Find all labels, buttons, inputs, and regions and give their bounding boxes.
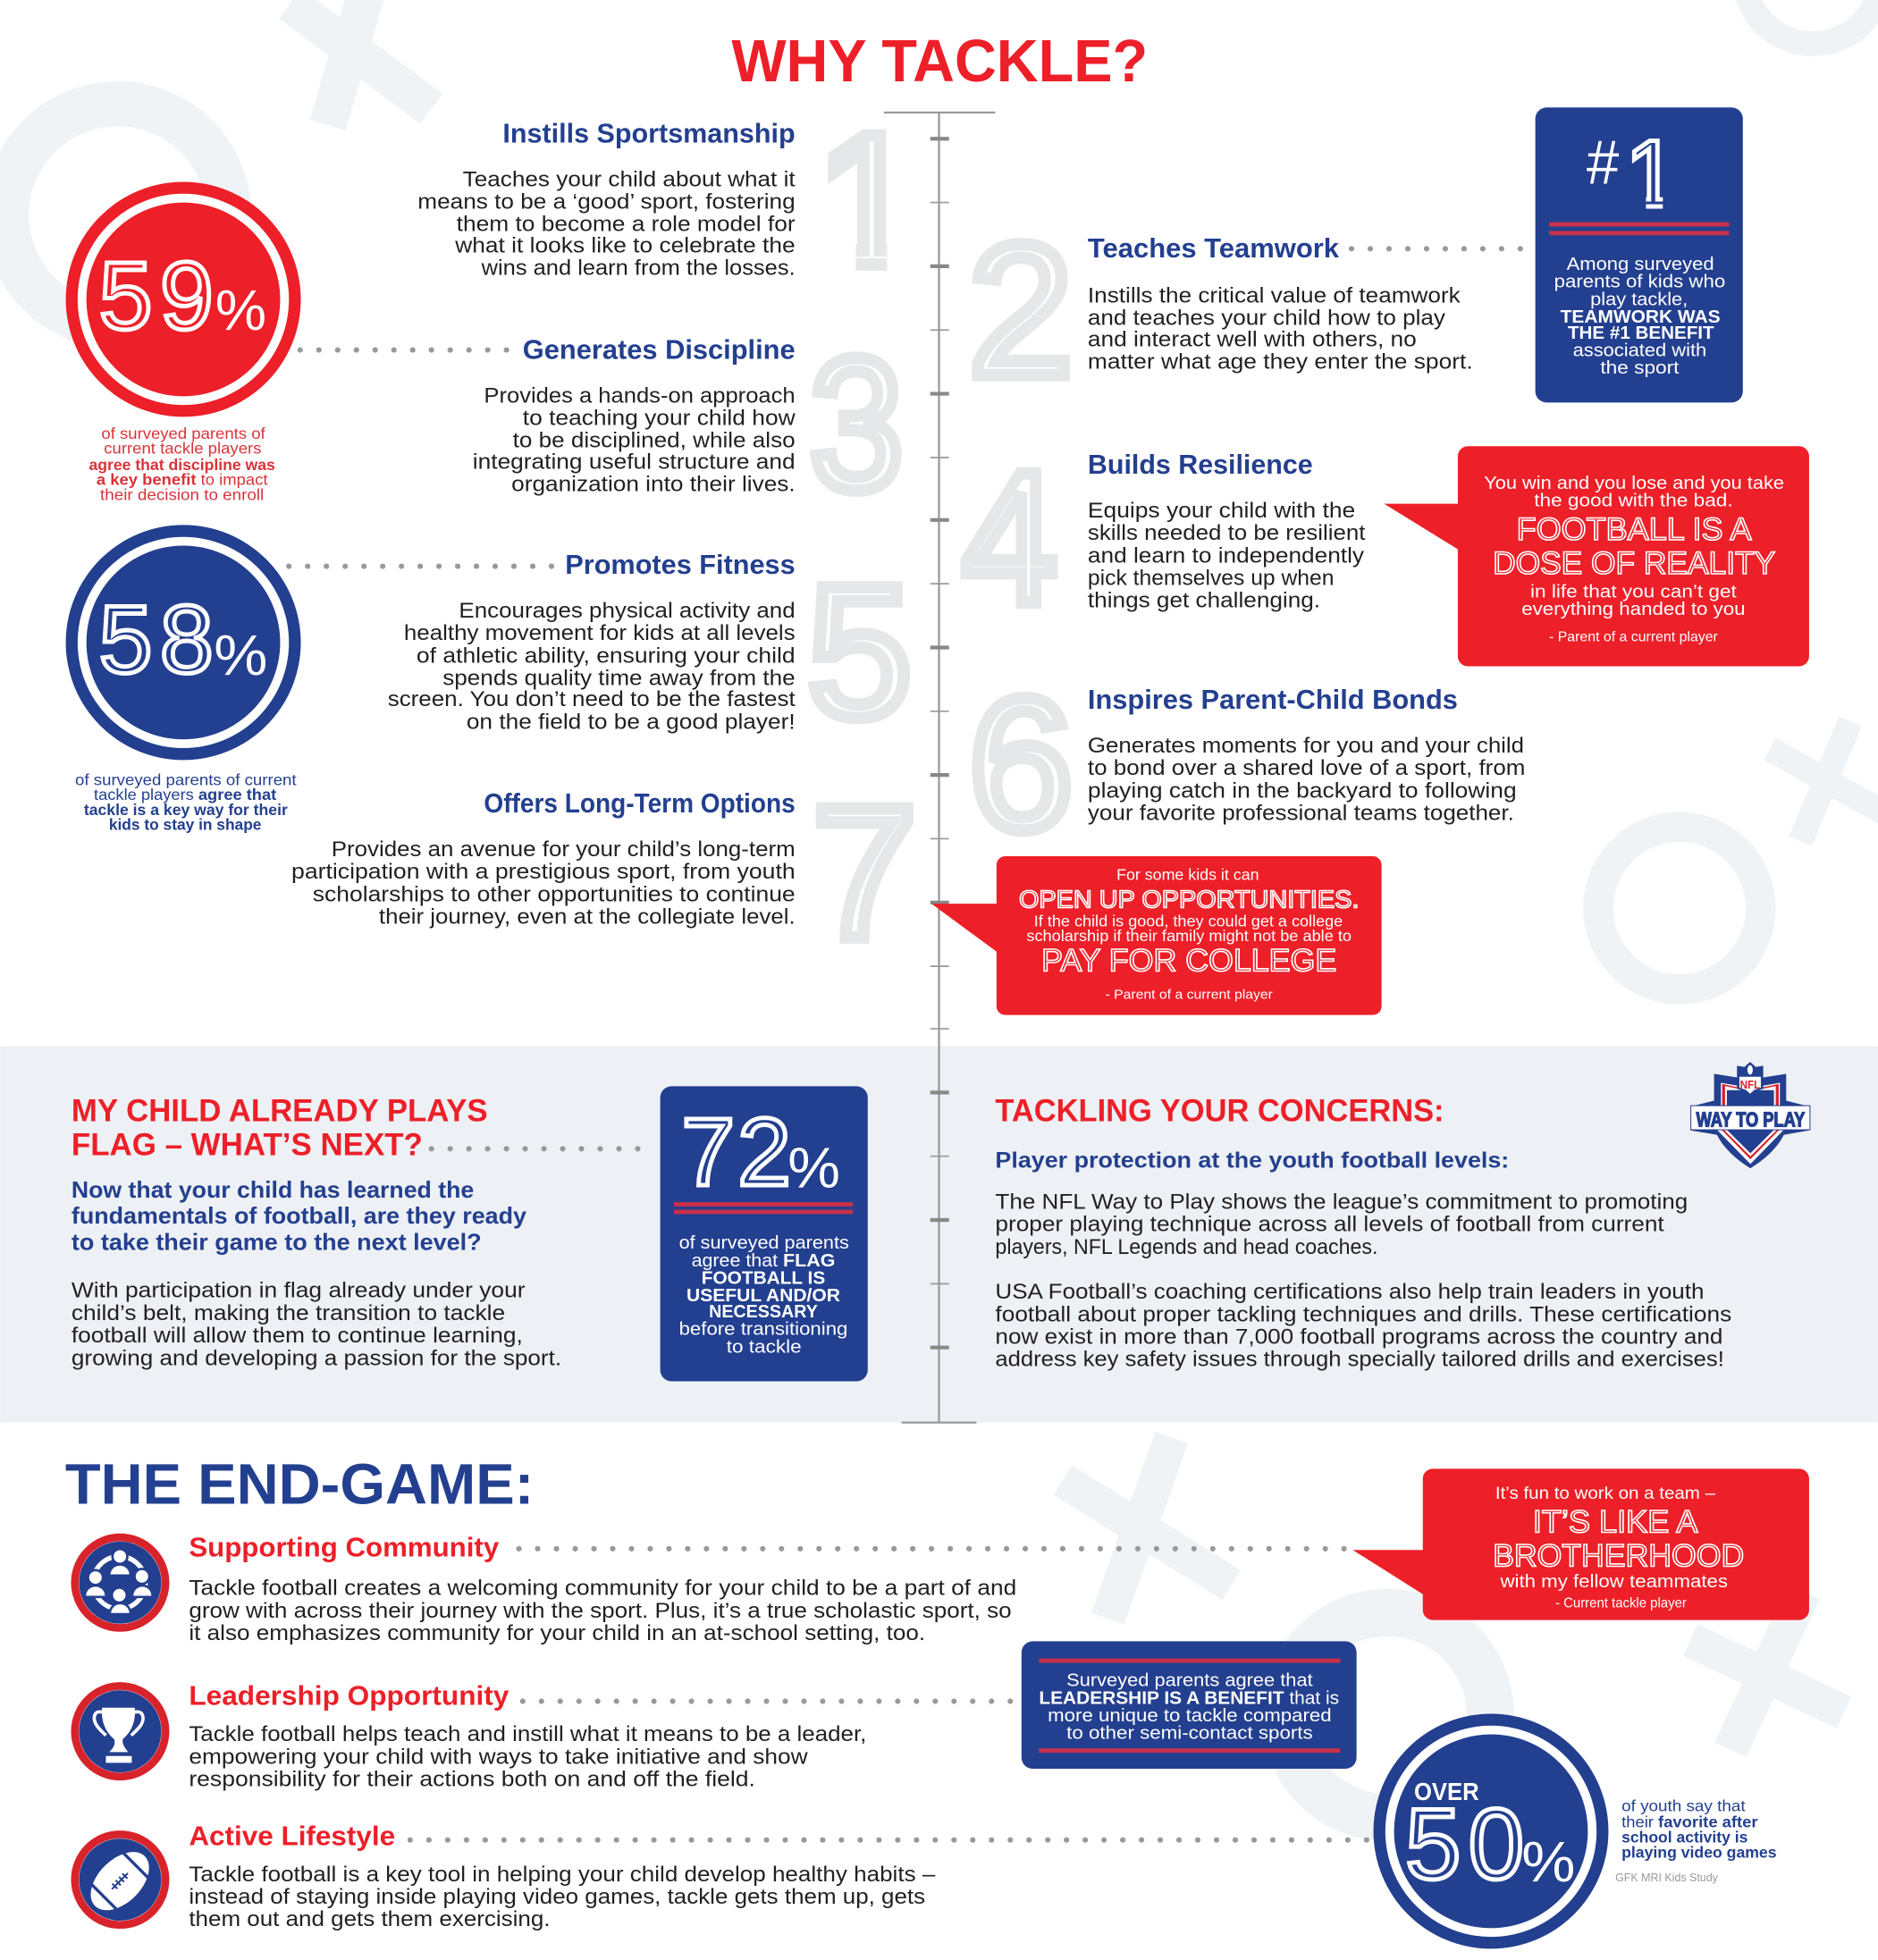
callout: open up opportunities quote: PAY FOR COLLEGE: [1041, 944, 1336, 979]
body text: proper playing technique across all levels of football from current: [995, 1213, 1664, 1237]
dotted connector: [1352, 247, 1523, 251]
dotted connector: [519, 1547, 1346, 1551]
body text: healthy movement for kids at all levels: [404, 621, 796, 645]
logo: NFL Way to Play shield: NFL: [1740, 1079, 1760, 1091]
number 5: 5: [807, 547, 912, 756]
heading: Builds Resilience: [1088, 449, 1313, 480]
panel: tackling your concerns: [995, 1094, 1731, 1372]
callout: brotherhood quote: BROTHERHOOD: [1493, 1538, 1744, 1573]
body text: skills needed to be resilient: [1088, 521, 1366, 545]
panel: active lifestyle: [75, 1820, 1368, 1931]
number 6: 6: [969, 660, 1073, 869]
body text: [1088, 734, 1525, 825]
callout: brotherhood quote: It’s fun to work on a team –: [1495, 1484, 1715, 1503]
body text: Tackle football helps teach and instill what it means to be a leader,: [189, 1722, 866, 1746]
callout: 72 percent: 72: [681, 1098, 794, 1206]
icon: community: [75, 1537, 165, 1628]
stat: 59 percent circle: 59: [99, 242, 221, 349]
callout: 72 percent: %: [787, 1136, 840, 1200]
panel: long-term options: [291, 769, 917, 978]
body text: on the field to be a good player!: [467, 710, 796, 734]
dotted connector: [300, 348, 509, 352]
callout: leadership benefit: more unique to tackle compared: [1048, 1706, 1332, 1726]
body text: grow with across their journey with the sport. Plus, it’s a true scholastic sport, so: [189, 1599, 1012, 1623]
panel: generates discipline: [300, 320, 904, 529]
panel: supporting community: [75, 1531, 1346, 1645]
heading: Active Lifestyle: [189, 1820, 395, 1851]
body text: Generates moments for you and your child: [1088, 734, 1524, 758]
callout: brotherhood quote: [1352, 1468, 1809, 1620]
panel: parent-child bonds: [969, 660, 1525, 869]
dotted connector: [523, 1699, 1013, 1703]
callout: dose of reality quote: - Parent of a current player: [1549, 629, 1718, 644]
callout: dose of reality quote: You win and you lose and you take: [1484, 474, 1784, 493]
body text: pick themselves up when: [1088, 567, 1334, 591]
body text: and learn to independently: [1088, 543, 1365, 568]
body text: spends quality time away from the: [442, 666, 796, 690]
panel: teaches teamwork: [969, 206, 1523, 416]
body text: The NFL Way to Play shows the league’s commitment to promoting: [995, 1190, 1688, 1214]
stat: 58 percent circle: 58: [99, 585, 221, 693]
body text: child’s belt, making the transition to tackle: [72, 1301, 505, 1325]
body text: [473, 383, 796, 497]
section heading: the end-game: THE END-GAME:: [65, 1452, 534, 1517]
body text: to teaching your child how: [523, 407, 796, 431]
caption: 58 percent: of surveyed parents of current: [75, 770, 297, 788]
callout: leadership benefit: to other semi-contact sports: [1066, 1723, 1313, 1743]
body text: and interact well with others, no: [1088, 327, 1417, 351]
number 1: 1: [816, 96, 921, 305]
callout: 72 percent: before transitioning: [679, 1320, 847, 1340]
stat: 59 percent circle: [66, 181, 301, 416]
body text: [995, 1190, 1731, 1372]
subheading: Player protection at the youth football levels:: [995, 1148, 1509, 1173]
body text: them to become a role model for: [457, 213, 796, 237]
body text: [388, 599, 796, 734]
number 3: 3: [810, 320, 904, 529]
caption: over 50 percent: school activity is: [1621, 1829, 1747, 1846]
body text: now exist in more than 7,000 football programs across the country and: [995, 1325, 1722, 1349]
callout: number 1 benefit: [1536, 107, 1743, 402]
number 7: 7: [813, 769, 917, 978]
body text: playing catch in the backyard to following: [1088, 778, 1517, 803]
stat: over 50 percent circle: %: [1521, 1830, 1575, 1894]
body text: growing and developing a passion for the sport.: [72, 1346, 561, 1370]
caption: 59 percent: current tackle players: [104, 440, 262, 458]
callout: open up opportunities quote: - Parent of a current player: [1106, 988, 1273, 1002]
body text: participation with a prestigious sport, from youth: [291, 860, 796, 884]
heading: MY CHILD ALREADY PLAYS: [72, 1094, 488, 1129]
dotted connector: [289, 564, 552, 568]
body text: organization into their lives.: [511, 473, 796, 497]
callout: number 1 benefit: associated with: [1573, 341, 1706, 361]
body text: things get challenging.: [1088, 589, 1320, 613]
subheading: Now that your child has learned the: [72, 1178, 474, 1203]
heading: Promotes Fitness: [565, 549, 796, 580]
timeline: [884, 113, 995, 1423]
subheading: fundamentals of football, are they ready: [72, 1204, 527, 1229]
heading: Inspires Parent-Child Bonds: [1088, 684, 1458, 715]
callout: 72 percent: to tackle: [727, 1337, 802, 1357]
body text: [1088, 499, 1366, 613]
callout: dose of reality quote: the good with the bad.: [1534, 491, 1733, 510]
body text: [291, 837, 796, 930]
body text: address key safety issues through specially tailored drills and exercises!: [995, 1348, 1724, 1372]
body text: Provides a hands-on approach: [484, 383, 796, 408]
body text: means to be a ‘good’ sport, fostering: [417, 190, 796, 215]
heading: Teaches Teamwork: [1088, 232, 1340, 264]
callout: brotherhood quote: - Current tackle player: [1555, 1596, 1687, 1611]
callout: open up opportunities quote: [931, 856, 1382, 1015]
panel: flag to tackle: [72, 1094, 639, 1370]
source note: GFK MRI Kids Study: [1615, 1871, 1718, 1884]
caption: 58 percent: tackle is a key way for their: [84, 801, 288, 819]
body text: [189, 1863, 936, 1931]
body text: Equips your child with the: [1088, 499, 1355, 523]
callout: open up opportunities quote: If the child is good, they could get a college: [1034, 912, 1343, 930]
body text: USA Football’s coaching certifications also help train leaders in youth: [995, 1280, 1704, 1304]
heading: Supporting Community: [189, 1531, 499, 1562]
body text: their journey, even at the collegiate level.: [379, 905, 796, 930]
callout: number 1 benefit: #: [1587, 128, 1619, 198]
caption: 59 percent: [88, 425, 275, 503]
body text: Tackle football is a key tool in helping your child develop healthy habits –: [189, 1863, 936, 1887]
callout: leadership benefit: Surveyed parents agree that: [1066, 1671, 1313, 1691]
callout: 72 percent: agree that FLAG: [692, 1251, 835, 1271]
body text: to be disciplined, while also: [513, 429, 796, 453]
stat: over 50 percent circle: [1374, 1713, 1608, 1948]
body text: Instills the critical value of teamwork: [1088, 283, 1461, 307]
callout: number 1 benefit: parents of kids who: [1554, 273, 1725, 292]
caption: over 50 percent: of youth say that: [1621, 1797, 1746, 1815]
heading: Offers Long-Term Options: [484, 787, 796, 819]
callout: number 1 benefit: the sport: [1600, 358, 1680, 378]
body text: integrating useful structure and: [473, 450, 796, 474]
heading: Instills Sportsmanship: [502, 117, 796, 148]
body text: football will allow them to continue learning,: [72, 1324, 523, 1348]
body text: your favorite professional teams together.: [1088, 801, 1514, 825]
body text: responsibility for their actions both on and off the field.: [189, 1768, 755, 1792]
callout: open up opportunities quote: OPEN UP OPPORTUNITIES.: [1019, 885, 1359, 913]
callout: 72 percent: of surveyed parents: [679, 1233, 849, 1253]
body text: them out and gets them exercising.: [189, 1907, 551, 1931]
callout: number 1 benefit: play tackle,: [1590, 290, 1688, 309]
stat: over 50 percent circle: OVER: [1414, 1778, 1479, 1805]
caption: 58 percent: tackle players agree that: [94, 786, 276, 803]
callout: dose of reality quote: DOSE OF REALITY: [1493, 546, 1775, 581]
body text: what it looks like to celebrate the: [454, 234, 796, 258]
caption: 59 percent: of surveyed parents of: [101, 425, 265, 442]
body text: football about proper tackling techniques and drills. These certifications: [995, 1302, 1731, 1326]
body text: Encourages physical activity and: [459, 599, 796, 623]
logo: NFL Way to Play shield: WAY TO PLAY: [1697, 1107, 1805, 1131]
number 2: 2: [969, 206, 1073, 416]
callout: dose of reality quote: [1384, 446, 1809, 666]
caption: 59 percent: a key benefit to impact: [97, 471, 268, 489]
callout: dose of reality quote: in life that you can’t get: [1530, 583, 1737, 602]
dotted connector: [432, 1147, 639, 1151]
body text: With participation in flag already under your: [72, 1279, 526, 1303]
callout: brotherhood quote: IT’S LIKE A: [1533, 1505, 1698, 1540]
subheading: [72, 1178, 527, 1256]
callout: dose of reality quote: everything handed to you: [1521, 600, 1746, 619]
icon: football: [75, 1834, 165, 1925]
body text: [189, 1722, 866, 1792]
heading: Leadership Opportunity: [189, 1680, 509, 1712]
stat: 59 percent circle: %: [215, 278, 266, 342]
body text: and teaches your child how to play: [1088, 307, 1446, 331]
callout: number 1 benefit: Among surveyed: [1567, 255, 1714, 274]
callout: leadership benefit: [1022, 1641, 1357, 1769]
callout: 72 percent: NECESSARY: [709, 1302, 818, 1322]
body text: screen. You don’t need to be the fastest: [388, 687, 796, 711]
body text: of athletic ability, ensuring your child: [417, 644, 796, 668]
body text: [72, 1279, 561, 1370]
caption: over 50 percent: [1621, 1797, 1777, 1861]
caption: over 50 percent: their favorite after: [1621, 1813, 1758, 1831]
caption: 59 percent: agree that discipline was: [88, 456, 275, 474]
heading: [72, 1094, 488, 1162]
stat: over 50 percent circle: 50: [1405, 1788, 1531, 1900]
stat: 58 percent circle: %: [214, 623, 267, 687]
body text: [417, 167, 796, 281]
body text: [189, 1577, 1016, 1645]
number 4: 4: [962, 433, 1057, 643]
callout: leadership benefit: LEADERSHIP IS A BENEFIT that is: [1039, 1688, 1339, 1708]
logo: NFL Way to Play shield: [1691, 1062, 1810, 1168]
body text: to bond over a shared love of a sport, from: [1088, 756, 1525, 780]
panel: promotes fitness: [289, 547, 912, 756]
title: WHY TACKLE?: [731, 28, 1148, 95]
caption: 58 percent: [75, 770, 297, 834]
callout: number 1 benefit: THE #1 BENEFIT: [1568, 324, 1714, 343]
callout: 72 percent: USEFUL AND/OR: [686, 1286, 840, 1306]
stat: 58 percent circle: [66, 525, 301, 760]
callout: 72 percent: FOOTBALL IS: [702, 1268, 825, 1288]
heading: TACKLING YOUR CONCERNS:: [995, 1094, 1444, 1129]
callout: dose of reality quote: FOOTBALL IS A: [1517, 512, 1752, 547]
body text: [1088, 283, 1473, 374]
callout: open up opportunities quote: scholarship if their family might not be able to: [1026, 927, 1352, 945]
panel: builds resilience: [962, 433, 1366, 643]
heading: Generates Discipline: [523, 333, 796, 365]
body text: Provides an avenue for your child’s long-term: [332, 837, 796, 862]
callout: number 1 benefit: TEAMWORK WAS: [1561, 307, 1721, 327]
caption: 59 percent: their decision to enroll: [100, 485, 264, 503]
body text: it also emphasizes community for your child in an at-school setting, too.: [189, 1621, 925, 1645]
panel: instills sportsmanship: [417, 96, 925, 305]
callout: 72 percent: [661, 1086, 868, 1381]
body text: wins and learn from the losses.: [481, 257, 796, 281]
body text: players, NFL Legends and head coaches.: [995, 1235, 1377, 1259]
body text: empowering your child with ways to take initiative and show: [189, 1745, 808, 1769]
caption: 58 percent: kids to stay in shape: [109, 816, 262, 834]
caption: over 50 percent: playing video games: [1621, 1843, 1777, 1861]
body text: matter what age they enter the sport.: [1088, 350, 1473, 374]
subheading: to take their game to the next level?: [72, 1231, 482, 1256]
icon: trophy: [75, 1686, 165, 1777]
callout: number 1 benefit: 1: [1625, 121, 1678, 227]
heading: FLAG – WHAT’S NEXT?: [72, 1127, 423, 1162]
callout: open up opportunities quote: For some kids it can: [1116, 866, 1259, 884]
body text: scholarships to other opportunities to continue: [313, 882, 796, 906]
body text: Teaches your child about what it: [463, 167, 796, 191]
panel: leadership opportunity: [75, 1680, 1013, 1792]
body text: Tackle football creates a welcoming community for your child to be a part of and: [189, 1577, 1016, 1601]
dotted connector: [410, 1838, 1368, 1842]
band: lower grey section: [0, 1047, 1878, 1423]
body text: instead of staying inside playing video games, tackle gets them up, gets: [189, 1885, 925, 1909]
callout: brotherhood quote: with my fellow teammates: [1499, 1572, 1728, 1592]
